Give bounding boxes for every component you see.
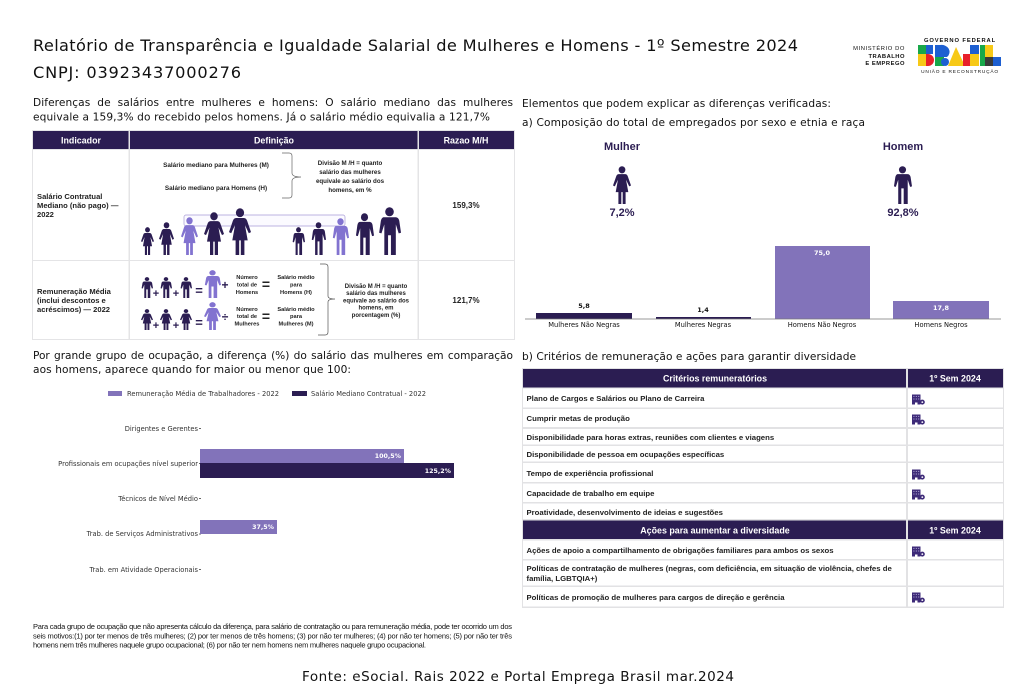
bar: salário mediano, profissionais [200,463,454,478]
male formula: + [153,288,159,300]
row: salário contratual mediano: 159,3% [452,201,480,210]
row: remuneração média: salário das mulheres [346,291,407,297]
row: salário contratual mediano: 2022 [37,210,54,219]
actions header: 1º Sem 2024 [929,526,981,536]
criteria header: Critérios remuneratórios [663,374,767,384]
bar: remuneração, administrativos [200,520,277,534]
footnote: seis motivos:(1) por ter menos de três mulheres; (2) por ter menos de três homens; (3) por não ter mulheres; (4) por não ter homens; (5) por não ter três [33,632,512,640]
criteria header [523,369,1003,388]
footnote: Para cada grupo de ocupação que não apresenta cálculo da diferença, para salário de contratação ou para remuneração média, pode ter ocorrido um dos [33,622,512,631]
formula labels: Mulheres [235,322,259,328]
logo: ministério e governo federal [853,38,1001,75]
occupation group heading: Por grande grupo de ocupação, a diferença (%) do salário das mulheres em comparação [33,350,513,362]
legend: Remuneração Média de Trabalhadores - 2022 [127,390,279,398]
formula labels: para [290,314,303,320]
bar: homens não negros [775,246,870,329]
action rows: Políticas de contratação de mulheres (negras, com deficiência, em situação de violência, chefes de [526,564,892,573]
female formula: + [153,320,159,332]
female share [604,141,641,219]
female formula: + [173,320,179,332]
category axis: Trab. em Atividade Operacionais [88,566,199,574]
right heading: elements: Elementos que podem explicar as diferenças verificadas: [522,98,831,110]
criterion rows: Capacidade de trabalho em equipe [526,489,655,498]
median definition text: Salário mediano para Mulheres (M) [163,162,269,169]
bar: homens negros: 17,8 [933,304,949,312]
category axis: Técnicos de Nível Médio [117,495,198,503]
row: salário contratual mediano: Salário Contratual [37,192,102,201]
formula labels [235,275,315,328]
formula labels: total de [237,314,257,320]
ministry name [853,45,905,67]
row: remuneração média: (inclui descontos e [37,296,106,305]
male formula: = [195,283,203,298]
actions header: Ações para aumentar a diversidade [640,526,790,536]
bar: mulheres não negras: Mulheres Não Negras [548,321,620,329]
formula labels: = [262,308,270,324]
formula labels: Homens [236,290,258,296]
table header [33,131,514,149]
actions header [523,520,1003,539]
action rows: Ações de apoio a compartilhamento de obrigações familiares para ambos os sexos [526,546,834,555]
government wordmark: UNIÃO E RECONSTRUÇÃO [921,68,999,75]
row: remuneração média: equivale ao salário dos [343,298,410,304]
category axis [58,425,201,574]
bar: remuneração, profissionais: 100,5% [375,453,402,460]
female share: Mulher [604,141,641,153]
government wordmark [918,38,1001,75]
median definition text: salário das mulheres [319,169,381,176]
table header: Definição [254,136,295,146]
category axis: Dirigentes e Gerentes [125,425,199,433]
title [33,36,798,82]
action rows: família, LGBTQIA+) [526,574,598,583]
intro text: differences in salaries: equivale a 159,3% do recebido pelos homens. Já o salário médio equivalia a 121,7% [33,112,490,124]
formula labels: Mulheres (M) [278,322,314,328]
occupation bar chart [58,390,454,574]
legend [108,390,426,398]
median definition text: Divisão M /H = quanto [318,160,382,167]
female formula: ÷ [222,310,229,324]
ministry name: TRABALHO [868,54,905,60]
male share: Homem [883,141,923,153]
title: CNPJ: 03923437000276 [33,63,241,82]
bar: mulheres não negras [536,302,632,329]
row: remuneração média: homens, em [358,306,394,312]
row: remuneração média: 121,7% [452,296,480,305]
median definition text [163,153,385,198]
formula labels: Número [236,275,258,281]
formula labels: Homens (H) [280,290,312,296]
bracket and division text [318,264,335,335]
male formula: + [221,278,229,292]
bar: salário mediano, profissionais: 125,2% [425,468,452,475]
row: remuneração média [33,261,514,339]
formula labels: Número [236,307,258,313]
indicator table [32,130,515,340]
criterion rows [523,388,1003,519]
bar: mulheres não negras: 5,8 [578,302,590,310]
row: remuneração média: acréscimos) — 2022 [37,305,110,314]
bar: remuneração, profissionais [200,449,404,463]
median definition text: Salário mediano para Homens (H) [165,185,267,192]
median highlight box [184,215,345,226]
bar: homens não negros: Homens Não Negros [788,321,857,329]
legend: Salário Mediano Contratual - 2022 [311,390,426,398]
ministry name: MINISTÉRIO DO [853,45,905,52]
female formula [141,302,229,332]
row: remuneração média: Remuneração Média [37,287,112,296]
subheading a: a) Composição do total de empregados por sexo e etnia e raça [522,117,865,129]
criterion rows: Disponibilidade para horas extras, reuniões com clientes e viagens [526,433,774,442]
government wordmark: GOVERNO FEDERAL [924,38,996,44]
occupation group heading: aos homens, aparece quando for maior ou menor que 100: [33,364,351,376]
row: remuneração média: Divisão M /H = quanto [345,284,408,290]
criterion rows: Tempo de experiência profissional [526,469,653,478]
row: remuneração média: porcentagem (%) [352,313,400,319]
criteria header: 1º Sem 2024 [929,374,981,384]
male share [883,141,923,219]
bar: mulheres negras [656,306,751,329]
ministry name: E EMPREGO [865,61,905,67]
category axis: Trab. de Serviços Administrativos [86,530,199,538]
criterion rows: Plano de Cargos e Salários ou Plano de Carreira [526,394,705,403]
median definition text: equivale ao salário dos [316,178,385,185]
criterion rows: Disponibilidade de pessoa em ocupações específicas [526,450,724,459]
formula labels: Salário médio [277,307,315,313]
bar: remuneração, administrativos: 37,5% [252,524,275,531]
female share: 7,2% [609,207,635,219]
icons: company has criterion [912,394,925,603]
bar: homens não negros: 75,0 [814,249,830,257]
action rows: Políticas de promoção de mulheres para cargos de direção e gerência [526,593,785,602]
formula labels: Salário médio [277,275,315,281]
bar: homens negros [893,301,989,329]
formula labels: total de [237,282,257,288]
intro text: differences in salaries: Diferenças de salários entre mulheres e homens: O salário mediano das mulheres [33,97,513,109]
bar: homens negros: Homens Negros [914,321,968,329]
source: Fonte: eSocial. Rais 2022 e Portal Emprega Brasil mar.2024 [302,669,734,685]
table header: Indicador [61,136,102,146]
action rows [523,540,1003,606]
occupation group heading [33,350,513,376]
male formula: + [173,288,179,300]
male share: 92,8% [887,207,919,219]
criterion rows: Cumprir metas de produção [526,414,630,423]
table header: Razao M/H [444,136,488,146]
median definition text: homens, em % [328,187,372,194]
row: salário contratual mediano [33,150,514,260]
criteria table [522,368,1004,608]
footnote: homens nem três mulheres naquele grupo ocupacional; (6) por não ter nem homens nem mulheres naquele grupo ocupacional. [33,640,426,650]
composition bar chart [525,246,1001,329]
male formula [142,270,229,300]
title: Relatório de Transparência e Igualdade Salarial de Mulheres e Homens - 1º Semestre 2024 [33,36,798,55]
female formula: = [195,315,203,330]
criterion rows: Proatividade, desenvolvimento de ideias e sugestões [526,508,723,517]
row: salário contratual mediano: Mediano (não pago) — [37,201,119,210]
category axis: Profissionais em ocupações nível superior [58,460,198,468]
bar: mulheres negras: 1,4 [697,306,709,314]
intro text: differences in salaries [33,97,513,124]
women row figures [141,208,251,255]
men row figures [293,207,401,255]
subheading b: b) Critérios de remuneração e ações para garantir diversidade [522,351,856,363]
formula labels: = [262,276,270,292]
bar: mulheres negras: Mulheres Negras [675,321,732,329]
formula labels: para [290,282,303,288]
